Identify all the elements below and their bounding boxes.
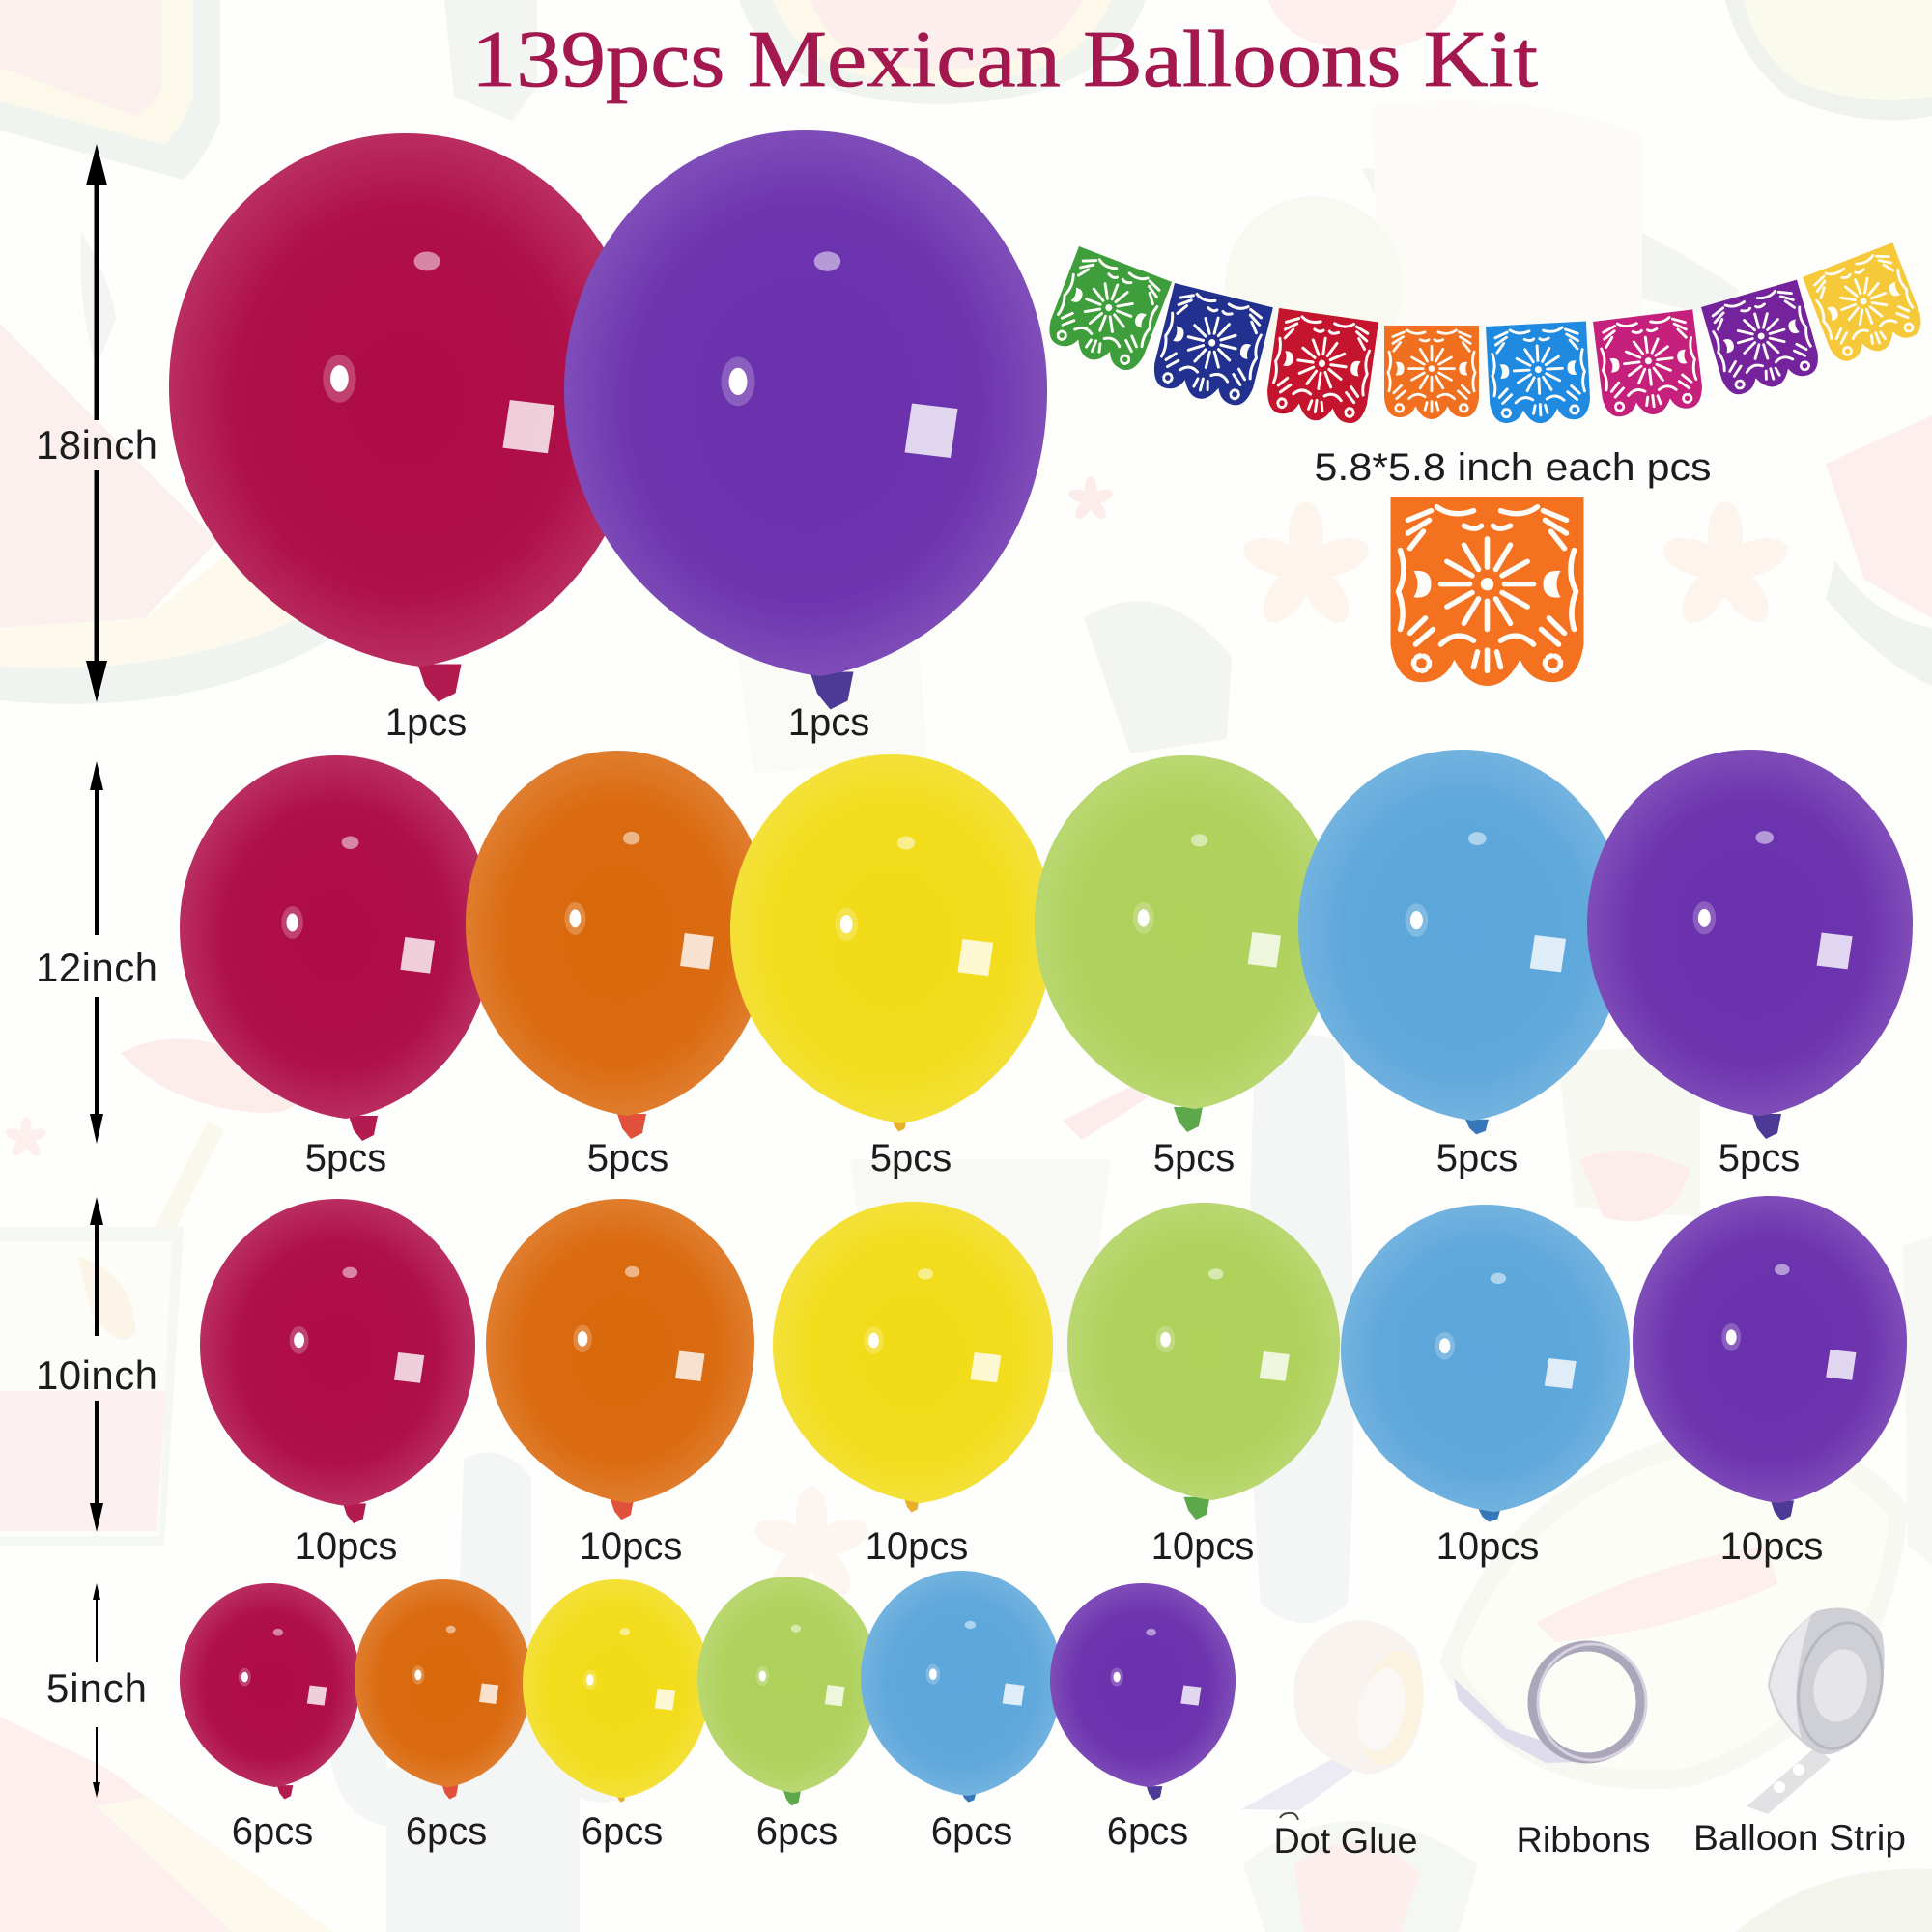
size marker: 10 inch (36, 1197, 157, 1532)
label: dot glue: Dot Glue (1273, 1821, 1418, 1861)
balloon: 10 inch crimson (200, 1199, 475, 1523)
balloon: 10 inch green (1067, 1203, 1340, 1520)
count labels: 10 inch row: 10pcs (1151, 1525, 1254, 1568)
balloon: 10 inch orange (486, 1199, 754, 1520)
flag: purple (1701, 280, 1824, 400)
title: 139pcs Mexican Balloons Kit (471, 14, 1538, 104)
size marker: 12 inch (36, 761, 157, 1144)
flag: red (1264, 308, 1378, 427)
count labels: 10 inch row (295, 1525, 1823, 1568)
count labels: 5 inch row: 6pcs (582, 1810, 663, 1853)
flag: navy (1149, 283, 1273, 411)
balloon: 12 inch crimson (180, 755, 493, 1141)
count labels: 12 inch row: 5pcs (870, 1137, 952, 1179)
accessory: ribbon coil (1454, 1644, 1646, 1763)
label: balloon strip: Balloon Strip (1693, 1818, 1906, 1858)
balloon: 12 inch blue (1298, 750, 1627, 1134)
accessory: dot glue roll (1241, 1620, 1434, 1810)
balloon: 12 inch purple (1587, 750, 1913, 1139)
size marker: 5 inch: 5inch (46, 1665, 147, 1711)
count labels: 5 inch row (232, 1810, 1188, 1853)
flag: orange (1384, 326, 1479, 419)
balloon: 18 inch crimson (169, 133, 642, 701)
balloon: 5 inch orange (355, 1579, 531, 1799)
count labels: 10 inch row: 10pcs (866, 1525, 968, 1568)
flag: magenta (1593, 309, 1705, 420)
large orange flag (1391, 497, 1584, 686)
flag: yellow (1803, 242, 1927, 367)
label: ribbons: Ribbons (1517, 1820, 1650, 1860)
flag: green (1042, 246, 1172, 377)
balloon: 5 inch green (697, 1577, 878, 1805)
count labels: 10 inch row: 10pcs (1436, 1525, 1539, 1568)
size marker: 5 inch (46, 1583, 147, 1798)
papel picado banner (1042, 242, 1927, 427)
balloon: 5 inch purple (1050, 1583, 1236, 1800)
count labels: 12 inch row (305, 1137, 1800, 1179)
flag size label: 5.8*5.8 inch each pcs (1314, 446, 1712, 489)
balloon: 10 inch yellow (773, 1202, 1053, 1513)
size marker: 12 inch: 12inch (36, 945, 157, 990)
balloons: 12 inch row (180, 750, 1913, 1141)
count labels: 5 inch row: 6pcs (232, 1810, 313, 1853)
count labels: 10 inch row: 10pcs (295, 1525, 397, 1568)
count labels: 12 inch row: 5pcs (1719, 1137, 1800, 1179)
count labels: 10 inch row: 10pcs (1720, 1525, 1823, 1568)
count labels: 12 inch row: 5pcs (1153, 1137, 1235, 1179)
balloon: 10 inch blue (1341, 1205, 1630, 1522)
balloon: 12 inch orange (466, 751, 770, 1139)
count labels: 10 inch row: 10pcs (580, 1525, 682, 1568)
count labels: 5 inch row: 6pcs (1107, 1810, 1188, 1853)
balloon: 5 inch crimson (180, 1583, 360, 1799)
accessory: balloon strip roll (1747, 1607, 1893, 1814)
balloon: 12 inch yellow (730, 754, 1053, 1132)
size marker: 18 inch (36, 144, 157, 702)
count labels: 5 inch row: 6pcs (406, 1810, 487, 1853)
count label: 18 inch crimson: 1pcs (385, 701, 467, 744)
count labels: 12 inch row: 5pcs (305, 1137, 386, 1179)
balloon: 12 inch green (1035, 755, 1337, 1132)
count labels: 12 inch row: 5pcs (587, 1137, 668, 1179)
size marker: 18 inch: 18inch (36, 422, 157, 468)
balloon: 5 inch yellow (523, 1579, 710, 1803)
count labels: 12 inch row: 5pcs (1436, 1137, 1518, 1179)
balloons: 5 inch row (180, 1571, 1236, 1805)
count label: 18 inch purple: 1pcs (788, 701, 869, 744)
count labels: 5 inch row: 6pcs (756, 1810, 838, 1853)
flag: blue (1486, 322, 1591, 426)
balloon: 5 inch blue (861, 1571, 1062, 1803)
balloon: 10 inch purple (1633, 1196, 1907, 1520)
balloons: 10 inch row (200, 1196, 1907, 1523)
size marker: 10 inch: 10inch (36, 1352, 157, 1398)
count labels: 5 inch row: 6pcs (931, 1810, 1012, 1853)
balloon: 18 inch purple (564, 130, 1047, 709)
